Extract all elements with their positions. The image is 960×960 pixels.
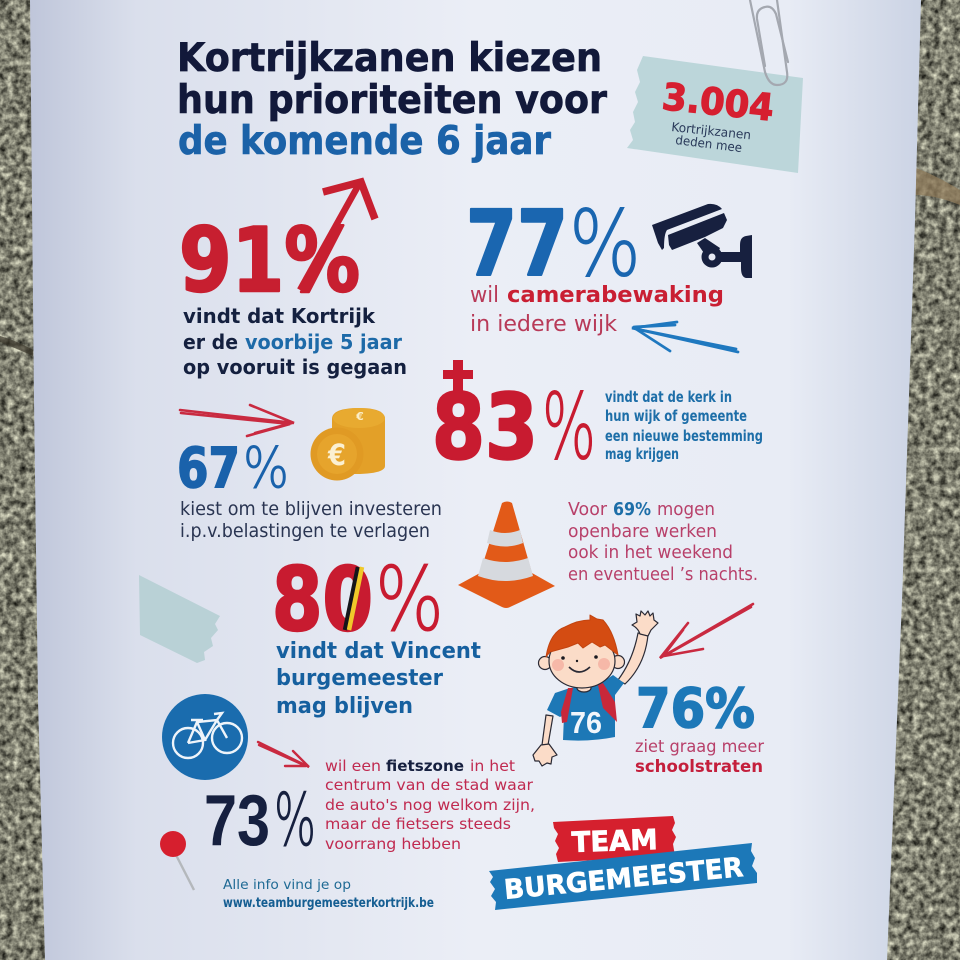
text: cycling zone: fietszone xyxy=(386,757,464,775)
illustration: waving boy xyxy=(533,611,658,766)
arrow: red pointing to boy xyxy=(660,604,753,658)
icon: map pin xyxy=(160,831,194,890)
caption: op vooruit is gegaan xyxy=(183,355,407,379)
blue ribbon xyxy=(489,843,757,910)
tape xyxy=(627,56,803,173)
text: cycling zone xyxy=(325,757,535,853)
caption: burgemeester xyxy=(276,666,443,691)
caption: mag krijgen xyxy=(605,445,679,463)
shirt xyxy=(547,675,624,741)
icon: euro coins xyxy=(310,408,385,480)
number: 83 xyxy=(432,375,538,480)
text: cycling zone: centrum van de stad waar xyxy=(325,776,534,794)
tape with participant count xyxy=(627,56,803,173)
logo word team: TEAM xyxy=(571,823,658,859)
arrow: blue pointing left xyxy=(632,322,738,352)
icon: euro coins: € xyxy=(355,410,364,423)
count: 3.004 xyxy=(660,75,776,130)
raised hand xyxy=(632,611,658,636)
count caption: Kortrijkzanen xyxy=(671,119,752,142)
caption xyxy=(605,388,763,463)
title: de komende 6 jaar xyxy=(178,119,552,164)
stat: 67 percent xyxy=(177,436,442,542)
number: 67 xyxy=(177,436,240,500)
caption xyxy=(180,498,442,542)
eyes xyxy=(561,656,565,660)
caption: mag blijven xyxy=(276,694,413,719)
website info xyxy=(223,878,434,911)
title xyxy=(177,36,608,164)
caption: schoolstraten xyxy=(635,757,763,777)
caption: er de xyxy=(183,330,238,354)
icon: traffic cone xyxy=(458,502,555,608)
caption: wil xyxy=(470,283,499,308)
text: public works 69 percent: openbare werken xyxy=(568,521,717,542)
ears xyxy=(538,656,552,670)
title: Kortrijkzanen kiezen xyxy=(177,36,602,81)
lower hand xyxy=(533,744,557,766)
icon: security camera xyxy=(652,204,752,278)
caption: hun wijk of gemeente xyxy=(605,407,747,425)
percent sign: % xyxy=(243,436,289,501)
logo word burgemeester: BURGEMEESTER xyxy=(503,852,745,906)
number: 91% xyxy=(179,209,360,312)
red ribbon xyxy=(553,816,676,862)
icon: paperclip xyxy=(750,0,788,85)
caption xyxy=(276,639,481,719)
stat: 80 percent xyxy=(272,548,481,719)
arrow: red pointing to cycling text xyxy=(258,742,309,767)
icon: cross xyxy=(443,360,473,395)
number: 76% xyxy=(636,677,755,740)
text: public works 69 percent: en eventueel ’s nachts. xyxy=(568,564,758,585)
icon: rising arrow xyxy=(300,182,375,290)
text: cycling zone: de auto's nog welkom zijn, xyxy=(325,796,535,814)
text: cycling zone: maar de fietsers steeds xyxy=(325,815,511,833)
stat: 83 percent church xyxy=(432,360,763,480)
number: 77 xyxy=(466,192,568,297)
collar xyxy=(577,684,591,692)
caption: ziet graag meer xyxy=(635,737,764,757)
text: public works 69 percent: Voor xyxy=(568,499,608,520)
title: hun prioriteiten voor xyxy=(177,78,608,123)
caption xyxy=(635,737,764,777)
text: public works 69 percent: ook in het weekend xyxy=(568,542,733,563)
text: public works 69 percent: mogen xyxy=(657,499,715,520)
smile xyxy=(569,667,590,672)
caption xyxy=(183,304,407,379)
cheeks xyxy=(552,659,564,671)
face xyxy=(549,634,615,688)
arrow: red pointing right xyxy=(180,405,294,436)
stat: 73 percent xyxy=(204,778,316,862)
icon: euro coins: € xyxy=(327,438,346,472)
raised arm xyxy=(618,633,648,684)
text: cycling zone: wil een xyxy=(325,757,381,775)
caption: kiest om te blijven investeren xyxy=(180,498,442,520)
logo: team burgemeester xyxy=(489,816,757,910)
caption: vindt dat Kortrijk xyxy=(183,304,376,328)
text: public works 69 percent xyxy=(568,499,758,585)
count caption: deden mee xyxy=(675,132,743,155)
percent sign: % xyxy=(375,548,444,651)
caption: camerabewaking xyxy=(507,283,724,308)
lower arm xyxy=(542,715,553,745)
icon: bicycle sign xyxy=(162,694,248,780)
number: 80 xyxy=(272,549,373,651)
stat: 77 percent xyxy=(466,192,724,337)
caption: vindt dat de kerk in xyxy=(605,388,732,406)
shirt number: 76 xyxy=(570,705,602,740)
stat: 91 percent xyxy=(179,182,407,379)
stat: 76 percent xyxy=(635,677,764,777)
text: cycling zone: in het xyxy=(470,757,515,775)
caption: vindt dat Vincent xyxy=(276,639,481,664)
text: public works 69 percent: 69% xyxy=(613,499,651,520)
belgian flag stripe xyxy=(345,567,362,630)
caption: i.p.v.belastingen te verlagen xyxy=(180,520,430,542)
caption: in iedere wijk xyxy=(470,312,617,337)
website info: Alle info vind je op xyxy=(223,878,351,893)
percent sign: % xyxy=(274,778,316,862)
backpack straps xyxy=(561,683,617,723)
caption xyxy=(470,283,724,337)
percent sign: % xyxy=(542,375,596,480)
caption: een nieuwe bestemming xyxy=(605,427,763,445)
text: cycling zone: voorrang hebben xyxy=(325,835,461,853)
percent sign: % xyxy=(569,192,641,297)
caption: voorbije 5 jaar xyxy=(245,330,402,354)
tape: decorative left xyxy=(139,575,220,663)
hair xyxy=(546,615,618,657)
website info: www.teamburgemeesterkortrijk.be xyxy=(223,896,434,911)
number: 73 xyxy=(204,781,270,861)
count caption xyxy=(671,119,752,155)
